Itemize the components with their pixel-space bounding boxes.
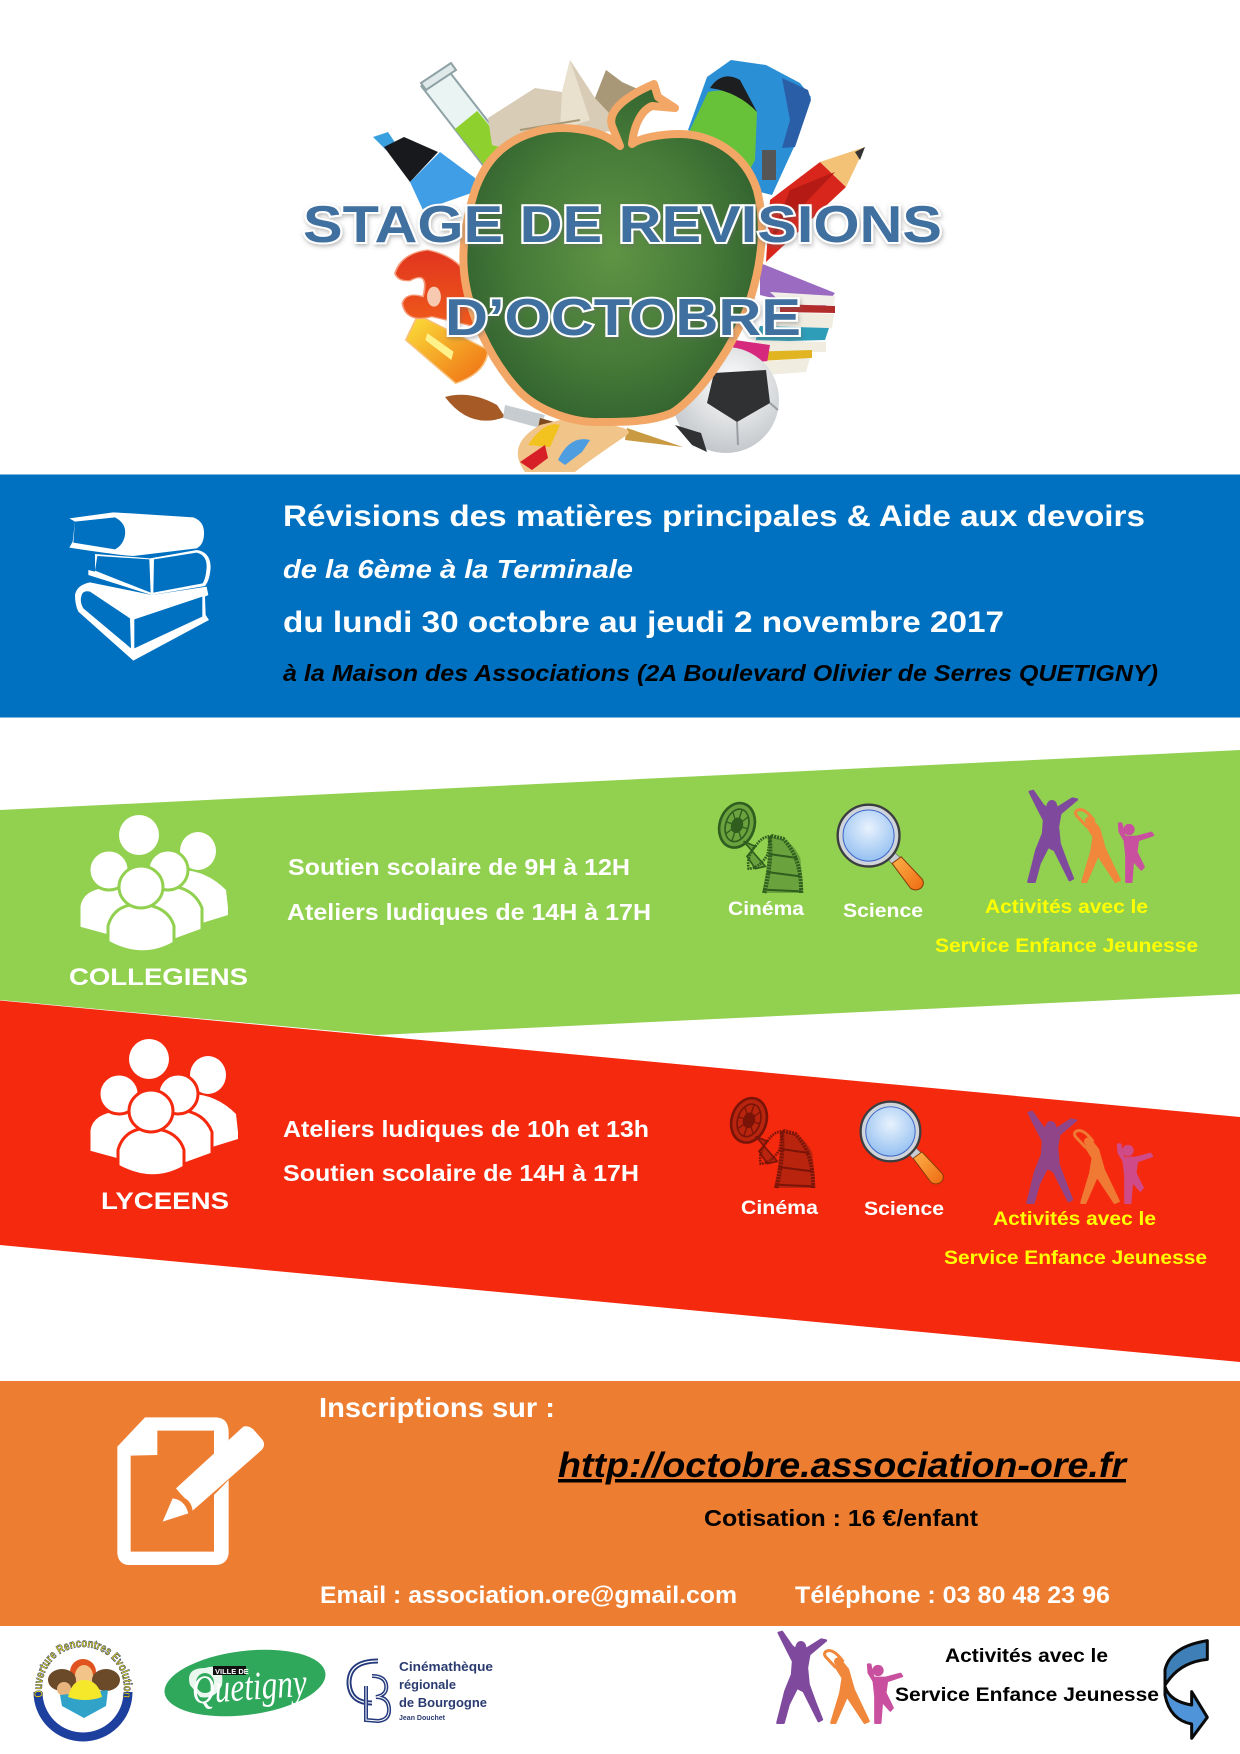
panel: collégiens band [0, 750, 1240, 1035]
schedule text: Soutien scolaire de 14H à 17H [283, 1160, 639, 1186]
label: collégiens: COLLEGIENS [69, 964, 248, 991]
icon: stack of books [69, 512, 211, 661]
activity labels: Cinéma [728, 898, 804, 920]
footer text: activities: Activités avec le [945, 1645, 1108, 1667]
panel: registration band [0, 1381, 1240, 1626]
activity labels: Science [864, 1198, 944, 1220]
activity labels: Activités avec le [993, 1208, 1156, 1230]
icon: dancers [1028, 791, 1153, 882]
paint palette [518, 420, 629, 472]
text block: programme: du lundi 30 octobre au jeudi 2 novembre 2017 [283, 606, 1004, 639]
footer logo: Cinémathèque régionale de Bourgogne: régionale [399, 1677, 456, 1692]
test tube [421, 63, 497, 158]
contact email: Email : association.ore@gmail.com [320, 1582, 737, 1609]
footer logo: Ouverture Rencontres Evolution: Ouverture Rencontres Evolution [34, 1640, 133, 1698]
footer text: activities [895, 1645, 1159, 1706]
icon: form with pencil [117, 1417, 264, 1565]
price: Cotisation : 16 €/enfant [704, 1505, 978, 1531]
contact phone: Téléphone : 03 80 48 23 96 [795, 1582, 1110, 1609]
link: http://octobre.association-ore.fr [558, 1446, 1129, 1485]
pencil [766, 147, 865, 262]
footer logo: Ouverture Rencontres Evolution [34, 1640, 133, 1742]
highlighter marker [373, 132, 480, 210]
open book [488, 60, 640, 150]
icon: group of people [89, 1039, 238, 1176]
activity labels: Cinéma [741, 1197, 818, 1219]
icon: group of people [79, 815, 228, 952]
panel: blue info band [0, 474, 1240, 718]
soccer ball [673, 347, 779, 453]
title [303, 196, 942, 347]
footer logo: Cinémathèque régionale de Bourgogne: de Bourgogne [399, 1695, 487, 1710]
icon: dancers [1027, 1112, 1152, 1203]
text block: programme [283, 500, 1158, 686]
footer logo: Cinémathèque régionale de Bourgogne: Cinémathèque [399, 1659, 493, 1674]
schedule text [283, 1116, 649, 1186]
text block: programme: de la 6ème à la Terminale [283, 554, 633, 584]
footer logo: Cinémathèque régionale de Bourgogne: Jean Douchet [399, 1715, 446, 1722]
title: D’OCTOBRE [445, 289, 801, 347]
text block: programme: Révisions des matières principales & Aide aux devoirs [283, 500, 1145, 533]
footer icon: curved arrow [1165, 1641, 1207, 1738]
backpack [688, 60, 811, 195]
schedule text [287, 854, 651, 925]
text block: programme: à la Maison des Associations (2A Boulevard Olivier de Serres QUETIGNY) [283, 660, 1158, 686]
activity labels: Science [843, 900, 923, 922]
activity labels: Service Enfance Jeunesse [944, 1247, 1207, 1269]
activity labels: Service Enfance Jeunesse [935, 935, 1198, 957]
activity labels [728, 896, 1198, 957]
footer icon: dancers [777, 1632, 902, 1723]
title illustration: apple blackboard and school objects [373, 60, 865, 472]
paint brush [445, 395, 683, 447]
icon: film reel [726, 1093, 816, 1188]
icon: magnifying glass [838, 805, 923, 890]
footer text: activities: Service Enfance Jeunesse [895, 1684, 1159, 1706]
icon: film reel [714, 798, 804, 893]
icon: magnifying glass [861, 1102, 943, 1184]
heading: inscriptions: Inscriptions sur : [319, 1392, 555, 1423]
footer logo: Cinémathèque régionale de Bourgogne [349, 1659, 493, 1722]
label: lycéens: LYCEENS [101, 1188, 229, 1215]
schedule text: Ateliers ludiques de 10h et 13h [283, 1116, 649, 1142]
activity labels [741, 1197, 1207, 1269]
footer logo: Ville de Quetigny [161, 1641, 329, 1725]
stacked books [728, 263, 835, 376]
apple blackboard [463, 84, 762, 422]
panel: lycéens band [0, 1000, 1240, 1362]
activity labels: Activités avec le [985, 896, 1148, 918]
footer logo: Ville de Quetigny: Quetigny [190, 1660, 308, 1713]
schedule text: Ateliers ludiques de 14H à 17H [287, 899, 651, 925]
title: STAGE DE REVISIONS [303, 196, 942, 254]
schedule text: Soutien scolaire de 9H à 12H [288, 854, 630, 880]
letter a [395, 250, 488, 383]
footer logo: Ville de Quetigny: VILLE DE [215, 1667, 249, 1676]
